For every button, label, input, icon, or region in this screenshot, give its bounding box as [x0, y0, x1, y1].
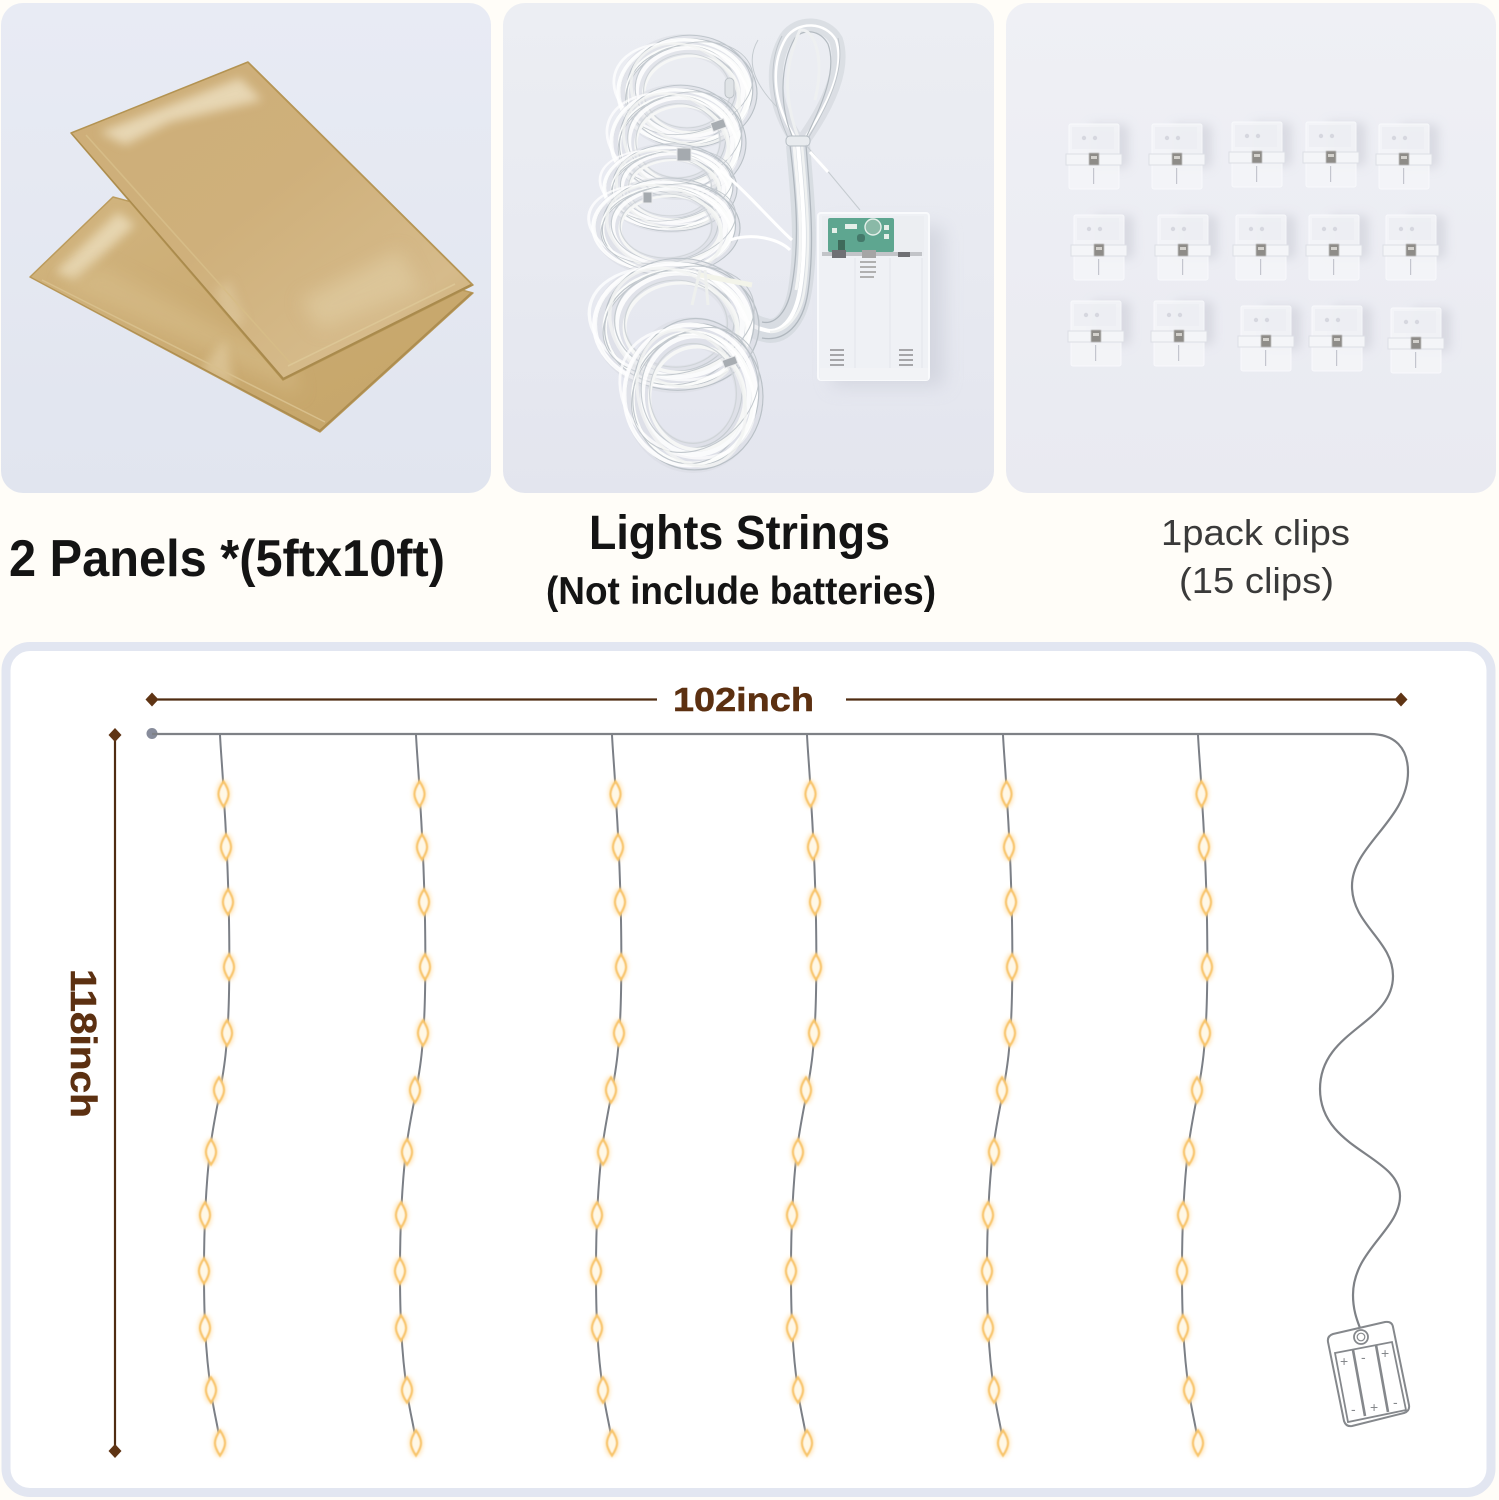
image: clips row 3 [1068, 301, 1451, 373]
image: coiled light loops [567, 23, 792, 488]
battery polarity mark: minus: - [1351, 1401, 1356, 1417]
caption line: pack count: 1pack clips [1161, 512, 1350, 553]
battery polarity mark: plus: + [1370, 1399, 1378, 1415]
panel: gold fabric panels [1, 3, 491, 493]
panel background: clips [1006, 3, 1496, 493]
panel background: lights [503, 3, 994, 493]
diagram frame [6, 646, 1491, 1492]
icon: battery box [1328, 1322, 1409, 1426]
metal contacts [822, 252, 922, 256]
dimension arrow: height 118inch [63, 728, 122, 1458]
light string 1 [197, 735, 236, 1457]
battery polarity mark: plus: + [1381, 1345, 1389, 1361]
caption: lights strings [546, 507, 936, 613]
image: clips row 2 [1071, 215, 1446, 280]
caption: clips [1161, 512, 1350, 601]
battery polarity mark: plus: + [1340, 1353, 1348, 1369]
battery polarity mark: minus: - [1361, 1349, 1366, 1365]
label: 102inch: 102inch [673, 681, 814, 718]
panel: plastic clips [1006, 3, 1496, 493]
light string 5 [980, 735, 1019, 1457]
panel background: fabric [1, 3, 491, 493]
silver ties [710, 118, 727, 132]
image: clips row 1 [1066, 122, 1439, 189]
image: transparent battery case [818, 213, 944, 386]
top cable with trailing wire [146, 728, 1408, 1328]
battery polarity mark: minus: - [1393, 1394, 1398, 1410]
circuit board [828, 218, 894, 252]
light string 4 [784, 735, 823, 1457]
light string 2 [393, 735, 432, 1457]
panel: light strings [503, 3, 994, 493]
caption line: lights strings title: Lights Strings [589, 507, 890, 560]
light string 3 [589, 735, 628, 1457]
caption: 2 panels: 2 Panels *(5ftx10ft) [9, 530, 445, 588]
panel: size diagram [6, 646, 1491, 1492]
caption line: clip count: (15 clips) [1179, 560, 1334, 601]
dimension arrow: width 102inch [146, 681, 1408, 718]
label: 118inch: 118inch [63, 969, 104, 1118]
image: lower folded gold fabric [30, 197, 473, 432]
springs [860, 262, 876, 277]
image: upper folded gold fabric [71, 62, 473, 380]
light string 6 [1175, 735, 1214, 1457]
caption line: batteries note: (Not include batteries) [546, 570, 936, 613]
image: long bundled cable [738, 25, 860, 339]
